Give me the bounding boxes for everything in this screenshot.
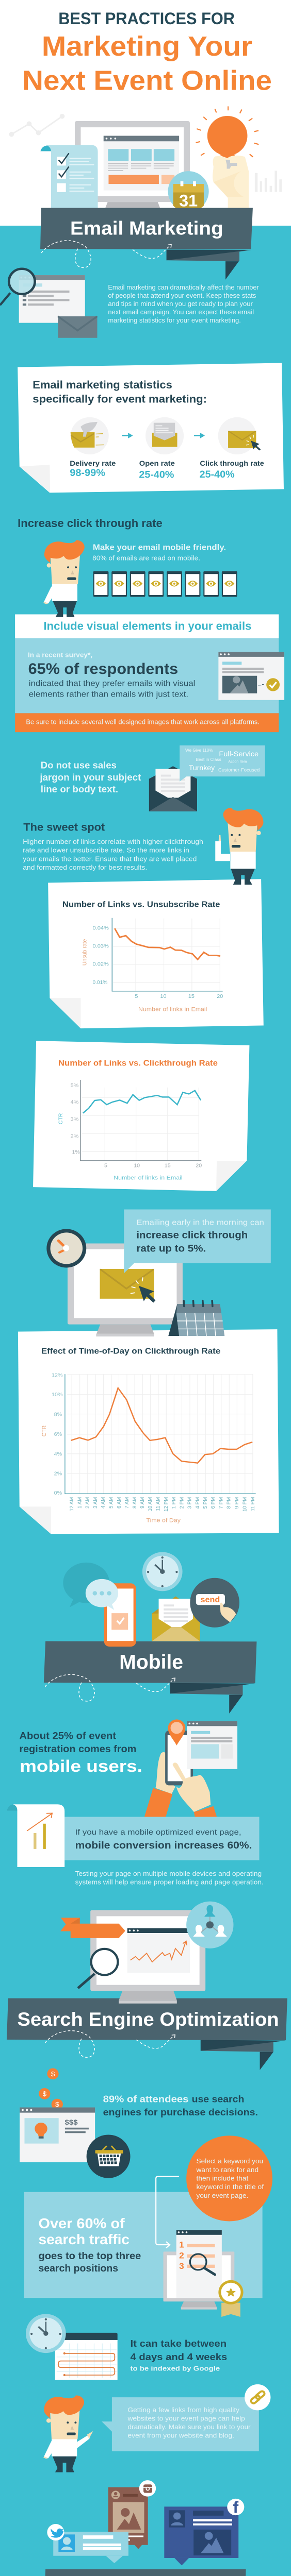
icon: facebook: f — [233, 2498, 239, 2516]
phones row — [93, 571, 237, 597]
stat: over 60 percent — [38, 2215, 141, 2274]
title: BEST PRACTICES FOR — [58, 9, 235, 28]
line chart: 1% — [72, 1149, 80, 1155]
panel: links vs unsubscribe chart — [48, 879, 264, 1028]
line chart: 6 PM — [211, 1497, 216, 1509]
sweet spot text — [23, 838, 203, 871]
line chart: 0% — [54, 1490, 62, 1496]
line chart: 5 PM — [203, 1497, 208, 1509]
line chart: 10 PM — [242, 1497, 248, 1512]
sweet spot text: and formatted correctly for best results. — [23, 863, 147, 871]
callout: early morning: Emailing early in the morning can — [136, 1218, 264, 1227]
stat: 89 percent: 89% of attendees — [103, 2094, 188, 2104]
callout: mobile conversion: If you have a mobile optimized event page, — [75, 1828, 241, 1837]
line chart: 0.03% — [92, 943, 109, 950]
icon: instagram — [139, 2480, 156, 2497]
dashed flourish — [45, 2031, 175, 2057]
character: man standing — [43, 540, 85, 617]
sweet spot text: rate and lower unsubscribe rate. So the more links in — [23, 846, 189, 854]
chart title: Effect of Time-of-Day on Clickthrough Rate — [41, 1347, 221, 1355]
banner: mobile: Mobile — [119, 1651, 183, 1673]
sweet spot text: Higher number of links correlate with higher clickthrough — [23, 838, 203, 845]
intro text: marketing statistics for your event marketing. — [108, 316, 241, 324]
jargon text: line or body text. — [41, 784, 118, 794]
line chart decoration — [9, 114, 64, 137]
icon: coins: $ — [51, 2070, 55, 2078]
chart title: Number of Links vs. Unsubscribe Rate — [62, 900, 220, 909]
line chart: 9 AM — [140, 1497, 146, 1509]
monitor with search results — [164, 2230, 234, 2310]
line chart: CTR — [41, 1425, 47, 1436]
line chart: 11 AM — [156, 1497, 161, 1511]
line chart: 20 — [217, 993, 223, 999]
delivery rate: 98-99% — [70, 467, 105, 479]
speech bubble: jargon: Best in Class — [196, 757, 221, 762]
icon: coins: $ — [43, 2090, 47, 2097]
calendar badge: 31 — [179, 192, 198, 210]
banner: email marketing: Email Marketing — [70, 217, 223, 239]
line chart: 7 AM — [124, 1497, 130, 1509]
panel: links vs clickthrough chart — [33, 1041, 249, 1191]
stat: indexing time — [131, 2338, 227, 2372]
line chart: 5 — [104, 1163, 107, 1168]
intro text: next email campaign. You can expect these email — [108, 308, 254, 316]
icon: web page with image — [218, 652, 284, 700]
callout: select keyword: keyword in the title of — [197, 2183, 264, 2191]
intro text: and tips in mind when you get ready to plan your — [108, 300, 253, 308]
icon: envelope with letter — [152, 1597, 200, 1641]
line chart — [82, 918, 223, 1013]
line chart: 4 PM — [195, 1497, 201, 1509]
callout: select keyword: want to rank for and — [196, 2166, 258, 2174]
callout: quality links — [102, 2397, 259, 2451]
stat: 89 percent: use search — [192, 2094, 244, 2104]
jargon text: jargon in your subject — [39, 772, 141, 783]
intro text: Email marketing can dramatically affect the number — [108, 283, 259, 291]
line chart: 8 AM — [132, 1497, 138, 1509]
testing text — [75, 1870, 264, 1886]
line chart: 3% — [71, 1116, 79, 1123]
callout: early morning — [124, 1210, 271, 1273]
line chart — [58, 1080, 202, 1181]
scroll with growth chart — [7, 1804, 64, 1867]
line chart: 15 — [188, 993, 195, 999]
callout: mobile conversion: mobile conversion increases 60%. — [75, 1840, 252, 1851]
line chart: 12% — [52, 1372, 63, 1378]
character: man pointing up — [215, 808, 264, 885]
line chart: 4 AM — [101, 1497, 106, 1509]
panel: visual elements — [15, 614, 284, 732]
icon: calendar schedule — [55, 2333, 118, 2380]
light bulb in hand — [196, 106, 258, 208]
stat: indexing time: 4 days and 4 weeks — [131, 2351, 227, 2362]
line chart: 3 AM — [93, 1497, 99, 1509]
banner: search engine optimization: Search Engine Optimization — [17, 2008, 279, 2030]
line chart: Number of links in Email — [138, 1007, 207, 1013]
speech bubble: jargon — [180, 745, 265, 782]
icon: wall clock — [46, 1229, 86, 1267]
line chart: 5 AM — [108, 1497, 114, 1509]
panel: email statistics — [18, 363, 284, 493]
arrow: connector — [156, 2176, 179, 2248]
card: facebook — [164, 2506, 238, 2565]
icon: delivery — [71, 417, 109, 454]
icon: chain link — [245, 2384, 270, 2410]
stat: 89 percent: engines for purchase decisions. — [103, 2107, 258, 2117]
line chart: 7 PM — [218, 1497, 224, 1509]
icon: clock — [26, 2314, 66, 2353]
survey text: elements rather than emails with just text. — [29, 690, 188, 699]
callout: quality links: event from your website and blog. — [127, 2432, 234, 2439]
stat: over 60 percent: search traffic — [38, 2231, 130, 2247]
icon: magnifier — [78, 1949, 118, 1988]
chart title: Number of Links vs. Clickthrough Rate — [58, 1059, 218, 1068]
banner: search engine optimization — [7, 1991, 287, 2070]
icon: send button — [190, 1578, 239, 1628]
delivery rate — [70, 460, 116, 479]
dashed flourish — [45, 1674, 175, 1701]
open rate — [139, 460, 175, 480]
arrow — [122, 433, 133, 438]
line chart: 3 PM — [187, 1497, 193, 1509]
icon: send button: send — [200, 1595, 220, 1604]
line chart: 5 — [135, 993, 138, 999]
testing text: systems will help ensure proper loading and page operation. — [75, 1878, 264, 1886]
monitor with chart — [90, 1910, 205, 1991]
icon: open — [146, 417, 184, 454]
survey text: 65% of respondents — [28, 661, 178, 677]
line chart: 10% — [52, 1392, 63, 1398]
line chart: 4% — [54, 1451, 62, 1457]
panel: time of day chart — [18, 1329, 279, 1534]
line chart: 9 PM — [234, 1497, 240, 1509]
arrow — [194, 433, 205, 438]
line chart: 8% — [54, 1412, 62, 1417]
heading: increase click through rate: Increase click through rate — [18, 517, 163, 530]
icon: hands holding phone — [144, 1719, 237, 1817]
line chart: 8 PM — [227, 1497, 232, 1509]
speech bubble: jargon: Customer-Focused — [218, 767, 260, 772]
icon: facebook — [227, 2498, 244, 2516]
bar chart decoration — [255, 171, 282, 192]
stat: indexing time: to be indexed by Google — [131, 2365, 220, 2372]
callout: early morning: increase click through — [136, 1230, 248, 1241]
banner: mobile — [44, 1641, 256, 1714]
icon: twitter — [47, 2524, 64, 2540]
line chart: 0.02% — [92, 961, 109, 968]
card: twitter — [53, 2532, 128, 2563]
heading: Email marketing statistics — [33, 379, 172, 391]
monitor with email — [68, 1243, 183, 1336]
testing text: Testing your page on multiple mobile devices and operating — [75, 1870, 262, 1877]
open rate: 25-40% — [139, 469, 174, 480]
click through rate: 25-40% — [200, 469, 235, 480]
line chart: 1 AM — [77, 1497, 83, 1509]
line chart: 20 — [196, 1163, 202, 1168]
icon: product web page — [20, 2107, 95, 2162]
callout: early morning: rate up to 5%. — [136, 1243, 206, 1255]
callout: mobile conversion — [64, 1817, 260, 1860]
survey text: indicated that they prefer emails with visual — [29, 680, 195, 688]
title — [22, 9, 272, 96]
icon: orange ribbon — [60, 1918, 125, 1938]
callout: select keyword: Select a keyword you — [197, 2157, 263, 2165]
mobile friendly text — [92, 543, 226, 562]
line chart: 2 AM — [85, 1497, 91, 1509]
jargon text: Do not use sales — [41, 760, 117, 770]
line chart: 2 PM — [179, 1497, 185, 1509]
mobile friendly text: Make your email mobile friendly. — [93, 543, 226, 552]
open rate: Open rate — [139, 460, 175, 468]
banner: email marketing — [40, 208, 253, 280]
line chart: 10 AM — [148, 1497, 153, 1511]
callout: select keyword: then include that — [197, 2175, 249, 2182]
stat: over 60 percent: goes to the top three — [38, 2251, 141, 2262]
line chart: 12 PM — [164, 1497, 169, 1512]
line chart: 12 AM — [69, 1497, 75, 1511]
panel: search traffic — [24, 2192, 263, 2298]
intro text: of people that attend your event. Keep these stats — [108, 292, 256, 299]
character: man pointing right — [43, 2395, 93, 2472]
sweet spot text: your emails the better. Ensure that they are well placed — [23, 855, 197, 863]
title: Marketing Your — [42, 31, 252, 62]
icon: envelope — [149, 766, 197, 811]
icon: click — [218, 417, 261, 454]
icon: phone with bubble — [86, 1579, 136, 1647]
mobile friendly text: 80% of emails are read on mobile. — [92, 554, 200, 562]
callout: select keyword: your event page. — [197, 2192, 248, 2199]
panel heading: Include visual elements in your emails — [44, 620, 251, 632]
icon: coins — [39, 2068, 63, 2110]
stat: 89 percent — [103, 2094, 258, 2117]
speech bubble: jargon: Action Item — [228, 760, 247, 764]
callout: quality links: dramatically. Make sure you link to your — [127, 2423, 251, 2431]
mobile users text — [19, 1731, 142, 1775]
monitor with search results: 1 — [179, 2240, 184, 2250]
line chart: 4% — [71, 1099, 79, 1106]
icon: shopping basket — [87, 2134, 131, 2178]
line chart: 1 PM — [171, 1497, 177, 1509]
tip: Be sure to include several well designed images that work across all platforms. — [26, 718, 260, 725]
line chart: 6 AM — [117, 1497, 122, 1509]
heading: specifically for event marketing: — [33, 393, 207, 405]
line chart: 10 — [134, 1163, 140, 1168]
icon: network of people — [186, 1902, 234, 1948]
click through rate: Click through rate — [200, 460, 264, 468]
mobile users text: mobile users. — [20, 1756, 142, 1775]
line chart: Unsub rate — [82, 939, 88, 965]
calendar badge — [168, 171, 209, 212]
icon: clock — [142, 1552, 183, 1591]
checklist scroll — [40, 145, 98, 208]
callout: quality links: websites to your event page can help — [127, 2415, 245, 2422]
line chart: 15 — [165, 1163, 171, 1168]
survey text — [28, 651, 195, 699]
speech bubble: jargon: Full-Service — [219, 750, 258, 758]
icon: coins: $ — [55, 2100, 59, 2108]
line chart: 5% — [71, 1082, 79, 1089]
banner: social media — [44, 2569, 246, 2576]
line chart: Time of Day — [146, 1518, 181, 1523]
speech bubble: jargon: Turnkey — [189, 764, 215, 772]
icon: product web page: $$$ — [65, 2119, 78, 2127]
line chart: 0.01% — [92, 979, 108, 986]
line chart: 0.04% — [92, 925, 109, 931]
line chart: 11 PM — [250, 1497, 256, 1511]
monitor with search results: 2 — [179, 2251, 184, 2261]
icon: award badge — [218, 2280, 244, 2317]
icon: desk calendar — [168, 1301, 224, 1336]
heading: sweet spot: The sweet spot — [23, 821, 105, 833]
delivery rate: Delivery rate — [70, 460, 116, 468]
icon: magnified email window — [0, 269, 97, 338]
dashed flourish — [41, 241, 171, 268]
stat: over 60 percent: Over 60% of — [38, 2215, 125, 2231]
line chart: 2% — [54, 1471, 62, 1477]
title: Next Event Online — [22, 65, 272, 96]
line chart — [41, 1372, 256, 1523]
heading — [33, 379, 207, 405]
card: instagram — [108, 2487, 148, 2549]
callout: quality links: Getting a few links from high quality — [127, 2406, 240, 2414]
line chart: 6% — [54, 1431, 62, 1437]
stat: over 60 percent: search positions — [38, 2263, 118, 2274]
survey text: In a recent survey*, — [28, 651, 92, 659]
line chart: Number of links in Email — [114, 1175, 183, 1181]
icon: web page with image: ← — [257, 683, 262, 687]
line chart: 10 — [160, 993, 167, 999]
click through rate — [200, 460, 264, 480]
mobile users text: registration comes from — [19, 1744, 136, 1755]
mobile users text: About 25% of event — [19, 1731, 117, 1742]
line chart: 2% — [71, 1133, 79, 1139]
callout: select keyword — [186, 2136, 272, 2221]
intro text — [108, 283, 259, 324]
stat: indexing time: It can take between — [131, 2338, 227, 2349]
jargon text — [39, 760, 141, 794]
monitor with search results: 3 — [179, 2261, 184, 2271]
icon: chat bubbles — [63, 1563, 109, 1607]
monitor with web page — [75, 121, 190, 214]
speech bubble: jargon: We Give 110% — [185, 748, 213, 753]
line chart: CTR — [58, 1113, 64, 1124]
